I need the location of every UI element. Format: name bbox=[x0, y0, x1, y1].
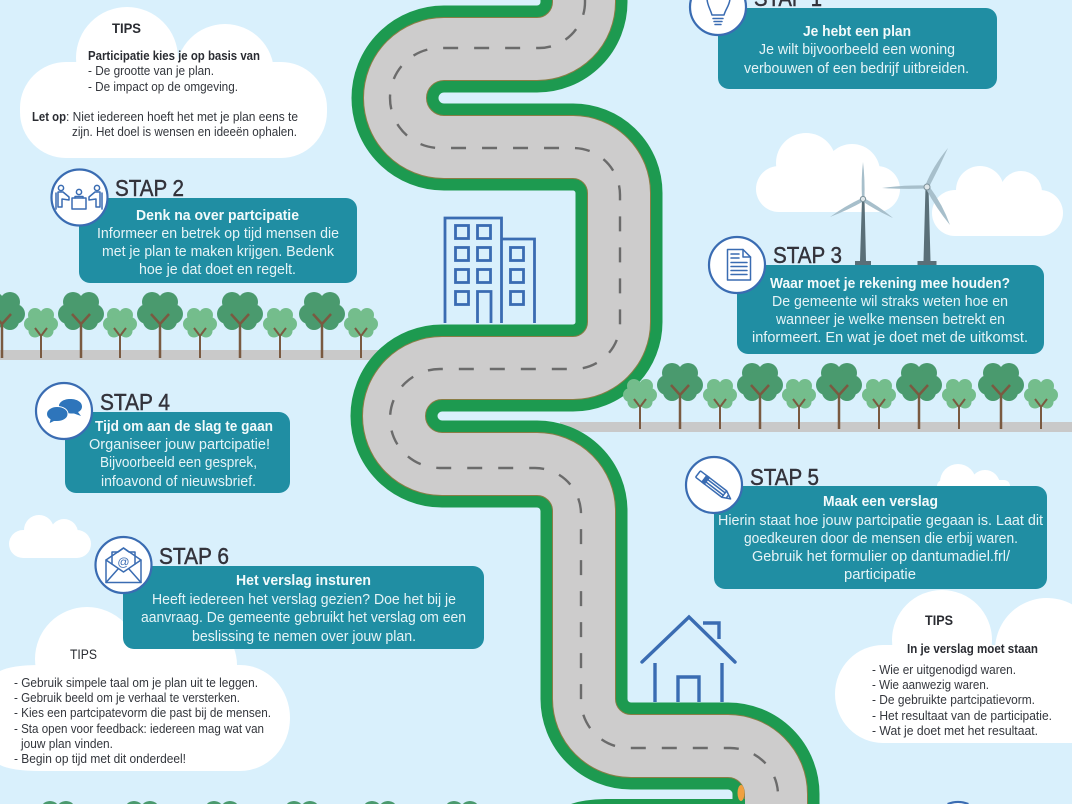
tips text: - Gebruik simpele taal om je plan uit te leggen. bbox=[14, 676, 258, 690]
tips text: - Wie er uitgenodigd waren. bbox=[872, 663, 1016, 677]
body text bbox=[744, 24, 969, 77]
cloud: behind step 5 bbox=[937, 464, 1010, 500]
text box bbox=[79, 198, 357, 283]
cloud: right of turbines bbox=[932, 166, 1063, 236]
heading: STAP 2 bbox=[115, 175, 184, 201]
tips text: - Gebruik beeld om je verhaal te versterken. bbox=[14, 691, 240, 705]
body text: De gemeente wil straks weten hoe en bbox=[772, 294, 1008, 310]
heading: STAP 6 bbox=[159, 543, 229, 569]
cloud: left of turbines bbox=[756, 133, 900, 212]
body text: goedkeuren door de mensen die erbij waren. bbox=[744, 531, 1018, 547]
body text: Denk na over partcipatie bbox=[136, 208, 299, 224]
body text: Maak een verslag bbox=[823, 494, 938, 510]
icon: document bbox=[709, 237, 765, 293]
cloud shape bbox=[20, 7, 327, 158]
body text bbox=[89, 419, 273, 490]
body text bbox=[141, 573, 466, 645]
body text bbox=[718, 494, 1043, 583]
tips text: : Niet iedereen hoeft het met je plan eens te bbox=[66, 110, 298, 124]
body text: hoe je dat doet en regelt. bbox=[139, 262, 296, 278]
trees: left row bbox=[0, 292, 378, 358]
road bbox=[390, 0, 778, 804]
orange road marker bbox=[738, 785, 744, 801]
panel: tips bottom left bbox=[0, 607, 290, 771]
text box bbox=[714, 486, 1047, 589]
body text: infoavond of nieuwsbrief. bbox=[101, 474, 256, 490]
panel: stap 4 bbox=[36, 383, 290, 493]
cloud: small left bbox=[9, 515, 91, 558]
cloud shape bbox=[835, 590, 1072, 743]
tips text: - Het resultaat van de participatie. bbox=[872, 709, 1052, 723]
tips text: - Sta open voor feedback: iedereen mag wat van bbox=[14, 722, 264, 736]
tips text: - De gebruikte partcipatievorm. bbox=[872, 693, 1035, 707]
next road section edge at the bottom bbox=[571, 799, 745, 804]
tips text: Participatie kies je op basis van bbox=[88, 49, 260, 63]
icon: envelope bbox=[96, 537, 152, 593]
trees: bottom row tops bbox=[43, 801, 477, 804]
heading: STAP 5 bbox=[750, 464, 819, 490]
tips text: Let op bbox=[32, 110, 66, 124]
icon: light bulb bbox=[690, 0, 746, 35]
tips text: - De impact op de omgeving. bbox=[88, 80, 238, 94]
tips text: - Kies een partcipatevorm die past bij de mensen. bbox=[14, 706, 271, 720]
icon: next step badge edge at the bottom bbox=[948, 802, 968, 804]
body text: Heeft iedereen het verslag gezien? Doe het bij je bbox=[152, 592, 456, 608]
tips text: - Wat je doet met het resultaat. bbox=[872, 724, 1038, 738]
panel: stap 3 bbox=[709, 237, 1044, 354]
icon: pencil bbox=[686, 457, 742, 513]
body text: Je wilt bijvoorbeeld een woning bbox=[759, 42, 955, 58]
body text: Waar moet je rekening mee houden? bbox=[770, 276, 1010, 292]
body text: wanneer je welke mensen betrekt en bbox=[775, 312, 1005, 328]
panel: stap 2 bbox=[52, 170, 357, 283]
text box bbox=[123, 566, 484, 649]
tips text: jouw plan vinden. bbox=[20, 737, 113, 751]
text box bbox=[737, 265, 1044, 354]
tips text bbox=[14, 676, 271, 766]
icon: apartment building bbox=[445, 218, 534, 323]
text box bbox=[65, 412, 290, 493]
body text bbox=[752, 276, 1028, 346]
trees: right row bbox=[623, 363, 1058, 429]
tips heading: TIPS bbox=[925, 612, 953, 628]
tips text: - De grootte van je plan. bbox=[88, 64, 214, 78]
body text: Het verslag insturen bbox=[236, 573, 371, 589]
panel: tips bottom right bbox=[835, 590, 1072, 743]
heading: STAP 3 bbox=[773, 242, 842, 268]
ground strip: left bbox=[0, 350, 385, 360]
panel: stap 1 bbox=[690, 0, 997, 89]
tips heading: TIPS bbox=[70, 646, 97, 662]
body text bbox=[97, 208, 339, 278]
tips text: - Wie aanwezig waren. bbox=[872, 678, 989, 692]
text box bbox=[718, 8, 997, 89]
cloud shape bbox=[0, 607, 290, 771]
body text: informeert. En wat je doet met de uitkomst. bbox=[752, 330, 1028, 346]
body text: Bijvoorbeeld een gesprek, bbox=[100, 455, 257, 471]
panel: stap 6 bbox=[96, 537, 484, 649]
wind turbines bbox=[830, 148, 950, 265]
panel: tips top left bbox=[20, 7, 327, 158]
body text: met je plan te maken krijgen. Bedenk bbox=[102, 244, 335, 260]
body text: Gebruik het formulier op dantumadiel.frl/ bbox=[752, 549, 1011, 565]
panel: stap 5 bbox=[686, 457, 1047, 589]
body text: aanvraag. De gemeente gebruikt het verslag om een bbox=[141, 610, 466, 626]
icon: meeting around table bbox=[52, 170, 108, 226]
body text: beslissing te nemen over jouw plan. bbox=[192, 629, 416, 645]
body text: verbouwen of een bedrijf uitbreiden. bbox=[744, 61, 969, 77]
tips text bbox=[32, 49, 298, 139]
icon: house bbox=[642, 617, 735, 702]
body text: participatie bbox=[844, 567, 916, 583]
icon: envelope: @ bbox=[117, 555, 130, 569]
tips heading: TIPS bbox=[112, 20, 141, 36]
body text: Je hebt een plan bbox=[803, 24, 911, 40]
ground strip: right bbox=[560, 422, 1072, 432]
tips text: zijn. Het doel is wensen en ideeën ophalen. bbox=[72, 125, 297, 139]
heading: STAP 4 bbox=[100, 389, 170, 415]
body text: Tijd om aan de slag te gaan bbox=[95, 419, 273, 435]
body text: Organiseer jouw partcipatie! bbox=[89, 437, 270, 453]
tips text: In je verslag moet staan bbox=[907, 642, 1038, 656]
tips text: - Begin op tijd met dit onderdeel! bbox=[14, 752, 186, 766]
body text: Informeer en betrek op tijd mensen die bbox=[97, 226, 339, 242]
tips text bbox=[872, 642, 1052, 738]
icon: speech bubbles bbox=[36, 383, 92, 439]
body text: Hierin staat hoe jouw partcipatie gegaan is. Laat dit bbox=[718, 513, 1043, 529]
